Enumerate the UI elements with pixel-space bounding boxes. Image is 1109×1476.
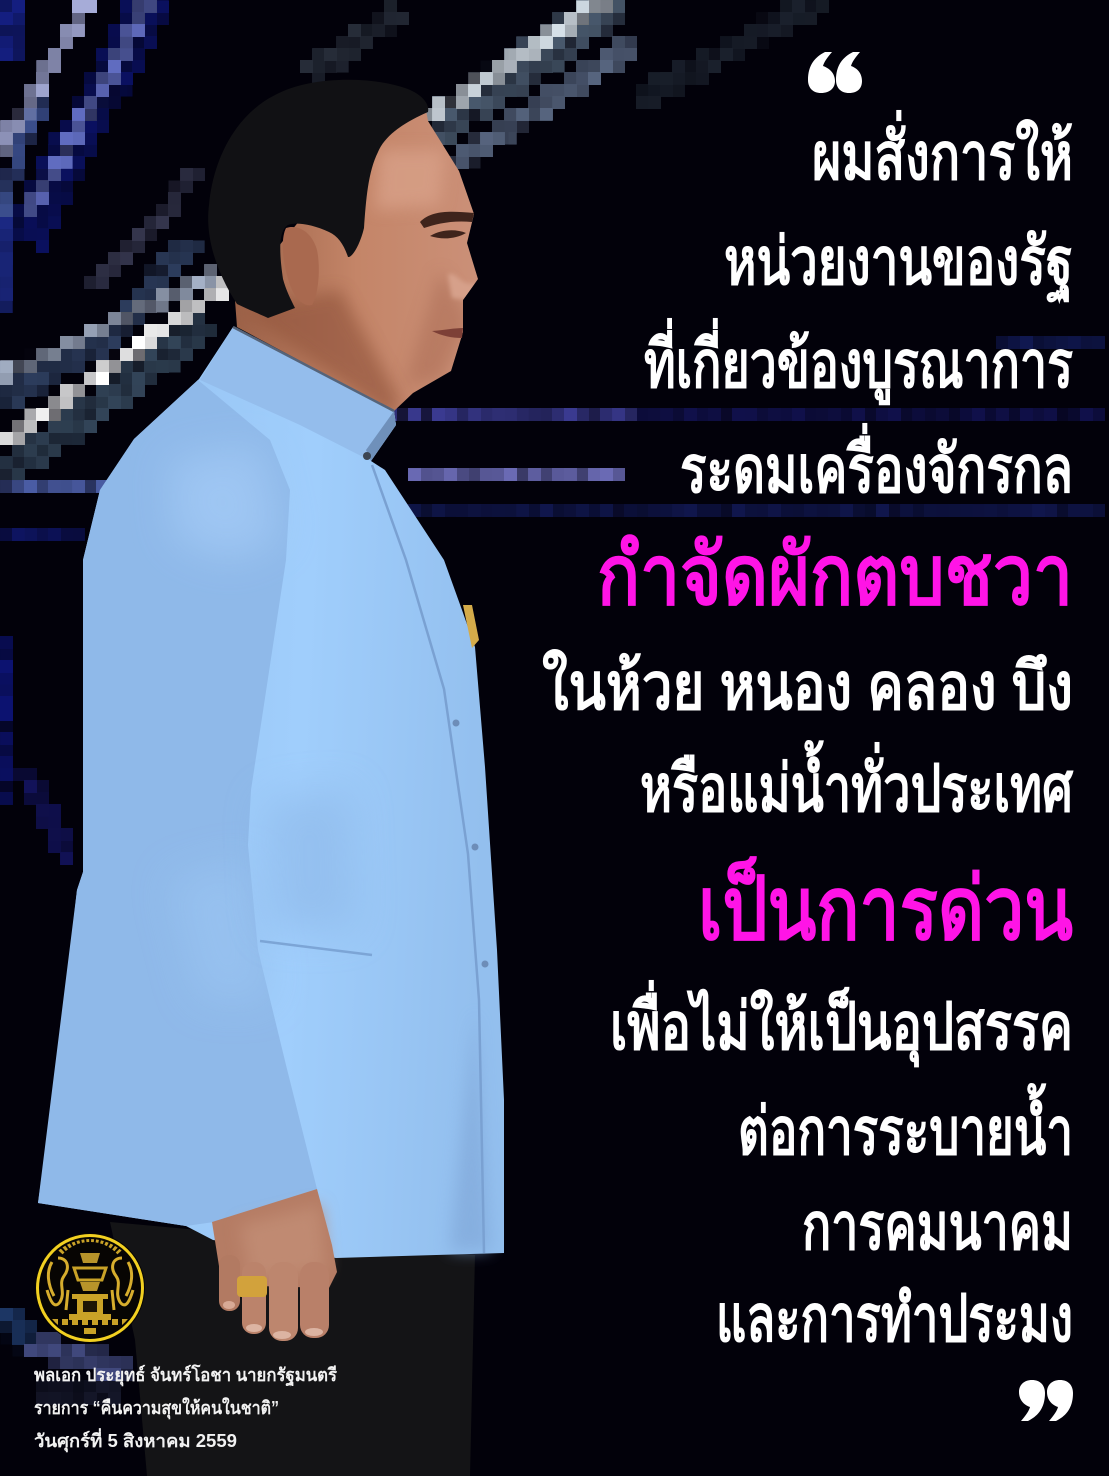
placket: [372, 465, 484, 1253]
government seal icon: [35, 1233, 145, 1343]
urn: [80, 1253, 100, 1263]
pin: [463, 605, 479, 648]
hair: [208, 80, 428, 318]
face shading: [256, 148, 476, 410]
caption: [34, 1364, 337, 1453]
mouth: [432, 328, 463, 338]
base ornaments: [52, 1319, 128, 1325]
caption: พลเอก ประยุทธ์ จันทร์โอชา นายกรัฐมนตรี: [34, 1364, 337, 1387]
hand: [212, 1189, 337, 1341]
quote mark close: [1019, 1380, 1073, 1421]
ring: [237, 1276, 267, 1297]
altar: [69, 1294, 111, 1320]
top flame border: [60, 1238, 120, 1252]
left and right lions: [47, 1258, 133, 1310]
quote mark open: [808, 52, 862, 93]
caption: รายการ “คืนความสุขให้คนในชาติ”: [34, 1397, 279, 1420]
quote text: [542, 109, 1074, 1355]
caption: วันศุกร์ที่ 5 สิงหาคม 2559: [34, 1428, 237, 1453]
eyebrow and eye: [420, 212, 474, 238]
jacket: [38, 327, 504, 1258]
buttons: [452, 720, 460, 726]
ear: [283, 227, 319, 305]
collar: [200, 327, 396, 461]
sleeve highlight: [170, 445, 280, 560]
trousers: [110, 1222, 475, 1476]
neck and face: [235, 105, 478, 411]
pocket: [260, 941, 372, 955]
sleeve: [38, 380, 317, 1226]
body shadow: [265, 790, 355, 930]
man in blue jacket: [38, 80, 504, 1476]
